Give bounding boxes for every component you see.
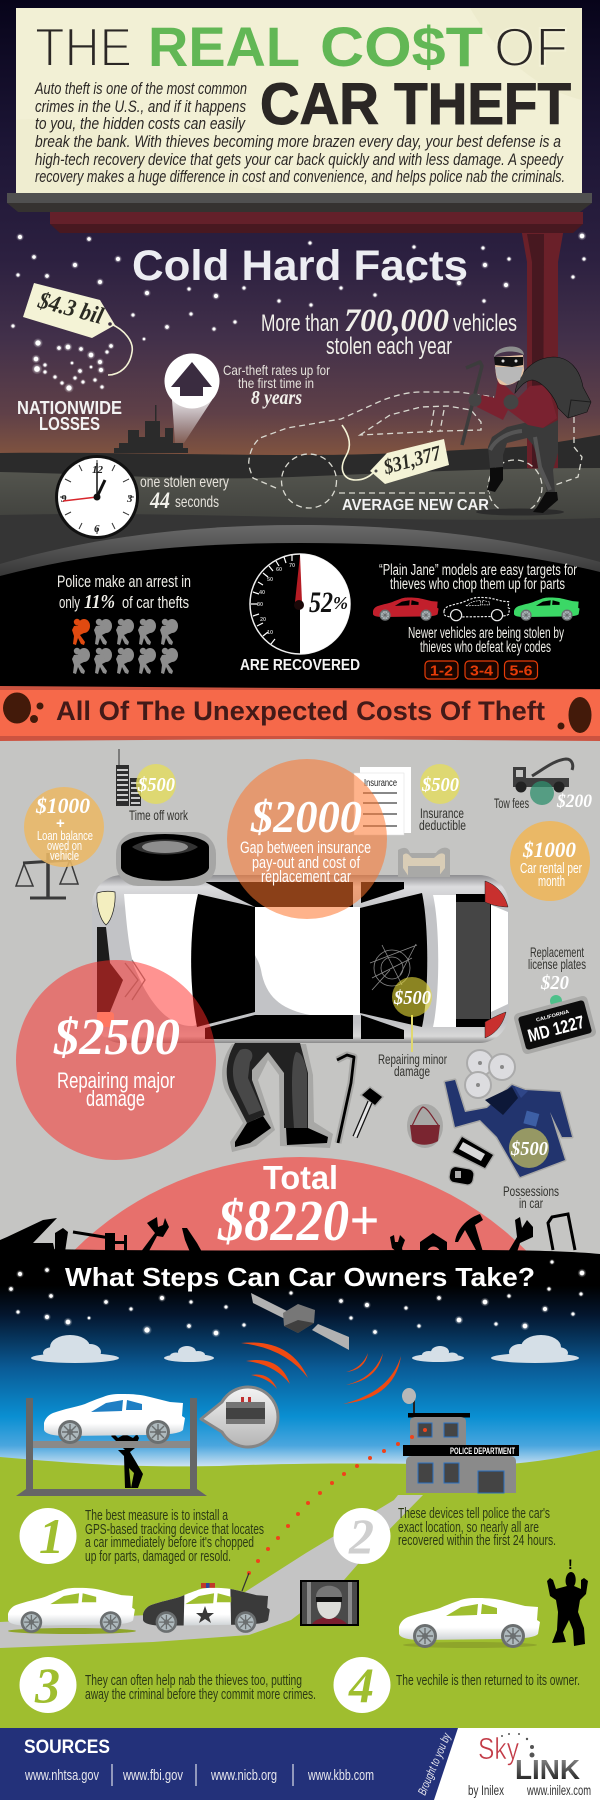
- gauge: 52% recovered: 10: [267, 630, 273, 636]
- icon: insurance document: [354, 767, 411, 835]
- stat: 700,000 vehicles: More than: [261, 310, 339, 337]
- step 1: [20, 1507, 264, 1565]
- icon: police car: [141, 1573, 274, 1633]
- cost: insurance deductible $500: Insurance: [420, 805, 464, 821]
- cost: gap $2000: Gap between insurance: [240, 838, 371, 857]
- icon: celebrating owner: [547, 1556, 588, 1646]
- stat: 700,000 vehicles: stolen each year: [326, 333, 452, 360]
- source links: www.nhtsa.gov: [24, 1767, 99, 1784]
- cost: minor damage $500: Repairing minor: [378, 1051, 447, 1067]
- title: CAR THEFT: [260, 72, 571, 137]
- stat: 700,000 vehicles: [261, 303, 517, 360]
- pillar supporting billboard: [521, 228, 564, 470]
- cost: gap $2000: [227, 759, 387, 919]
- icon: jacket: [445, 1080, 572, 1177]
- step 2: 2: [348, 1508, 374, 1564]
- title: OF: [494, 16, 568, 78]
- source links: www.kbb.com: [307, 1767, 374, 1784]
- step 3: 3: [34, 1657, 60, 1713]
- icons: three small cars: [373, 597, 580, 621]
- step 1: a car immediately before it's chopped: [85, 1534, 254, 1551]
- title: REAL: [148, 15, 300, 78]
- heading: sources: SOURCES: [24, 1737, 110, 1758]
- stat: rates up in 8 years: the first time in: [238, 375, 314, 391]
- cost: tow fees $200: [494, 781, 592, 812]
- price tag: nationwide losses: $4.3 bil: [35, 287, 106, 330]
- cost: time off work $500: Time off work: [129, 807, 189, 823]
- intro text block: [34, 79, 565, 186]
- icon: license plate: CALIFORNIA: [535, 1009, 570, 1024]
- title: [35, 15, 571, 137]
- stat: one stolen every 44 seconds: [140, 474, 229, 513]
- step 3: [20, 1657, 316, 1713]
- cost: gap $2000: $2000: [250, 791, 362, 842]
- gauge: 52% recovered: 60: [276, 567, 282, 573]
- panel: skylink logo: Brought to you by: [415, 1730, 454, 1797]
- icon: clock: 6: [94, 523, 100, 535]
- step 3: away the criminal before they commit more crimes.: [85, 1686, 316, 1703]
- icon: hammer: [355, 1088, 382, 1137]
- panel: skylink logo: Sky: [478, 1731, 519, 1766]
- clouds: [31, 1335, 579, 1363]
- banner: unexpected costs: [0, 686, 600, 741]
- cost: insurance deductible $500: deductible: [419, 817, 466, 833]
- icon: crowbar: [337, 1055, 354, 1143]
- gauge: 52% recovered: 50: [267, 577, 273, 583]
- stat: rates up in 8 years: [223, 362, 330, 409]
- label: average new car: AVERAGE NEW CAR: [342, 497, 489, 514]
- gauge: 52% recovered: %: [333, 593, 348, 613]
- illustration: thief legs: [222, 1043, 333, 1152]
- step 2: exact location, so nearly all are: [398, 1519, 539, 1536]
- intro text block: Auto theft is one of the most common: [34, 79, 247, 98]
- stars field: [10, 232, 587, 342]
- source links: [24, 1764, 374, 1786]
- icon: returned car: [399, 1598, 540, 1648]
- cost: car rental $1000: month: [538, 874, 565, 890]
- cost: time off work $500: [129, 764, 189, 823]
- stat: rates up in 8 years: Car-theft rates up for: [223, 362, 330, 378]
- icon: clock: 12: [92, 464, 104, 476]
- icons: compact discs: [465, 1050, 515, 1098]
- panel: skylink logo: LINK: [515, 1754, 580, 1785]
- icon: car seat: [398, 848, 450, 877]
- cost: car rental $1000: [510, 821, 590, 901]
- stat: one stolen every 44 seconds: one stolen every: [140, 474, 229, 491]
- cost: time off work $500: $500: [137, 774, 175, 796]
- step 4: 4: [348, 1657, 374, 1713]
- tracking signal dots: [247, 1428, 427, 1575]
- stat: 700,000 vehicles: vehicles: [453, 310, 517, 337]
- icon: white car: [44, 1394, 185, 1444]
- heading: cold hard facts: Cold Hard Facts: [132, 242, 468, 290]
- gauge: 52% recovered: 52: [309, 586, 333, 619]
- gauge: 52% recovered: 30: [257, 602, 263, 608]
- tools silhouettes: [0, 1214, 575, 1253]
- landscape hills: [0, 468, 600, 600]
- cost: license plates $20: [513, 944, 597, 1055]
- icon: clock: 9: [61, 493, 67, 505]
- cost: loan balance $1000: [24, 787, 104, 867]
- price tag: average new car: [342, 425, 449, 484]
- stat: one stolen every 44 seconds: seconds: [175, 494, 219, 511]
- green ground: [0, 1450, 600, 1730]
- intro text block: to you, the hidden costs can easily: [35, 114, 246, 133]
- billboard beam: [50, 212, 583, 233]
- icon: key fob: [449, 1166, 474, 1185]
- stars lower: [8, 1259, 586, 1338]
- cost: possessions $500: in car: [519, 1195, 543, 1211]
- icon: satellite: [251, 1293, 349, 1350]
- text: newer vehicles: [408, 625, 564, 656]
- label: nationwide losses: LOSSES: [39, 414, 100, 434]
- cost: possessions $500: [503, 1128, 559, 1211]
- gauge: 52% recovered: 20: [260, 617, 266, 623]
- price tag: average new car: $31,377: [380, 440, 445, 479]
- icon: cracked glass: [370, 944, 417, 990]
- cost: loan balance $1000: owed on: [47, 838, 82, 853]
- icon: signal arcs: [241, 1342, 401, 1404]
- cost: tow fees $200: $200: [556, 791, 592, 812]
- stat: rates up in 8 years: 8 years: [251, 387, 302, 409]
- night sky background: [0, 0, 600, 700]
- total dome: Total: [263, 1159, 338, 1196]
- label: are recovered: ARE RECOVERED: [240, 657, 360, 674]
- grey cost section background: [0, 738, 600, 1260]
- cost: gap $2000: replacement car: [261, 867, 351, 886]
- panel: sources footer: [0, 1728, 600, 1800]
- cost: loan balance $1000: Loan balance: [37, 828, 93, 843]
- illustration: top-view car: [92, 875, 509, 1043]
- badges: key codes: 3-4: [470, 664, 493, 680]
- badges: key codes: 1-2: [430, 664, 453, 680]
- cost: loan balance $1000: vehicle: [50, 848, 79, 863]
- icon: purse: [407, 1104, 443, 1148]
- cost: possessions $500: $500: [510, 1138, 548, 1160]
- cost: insurance deductible $500: [419, 764, 466, 833]
- text: plain jane: [379, 562, 577, 593]
- cost: major damage $2500: [16, 960, 216, 1160]
- icon: tire: [116, 832, 216, 886]
- icon: license plate: MD 1227: [525, 1012, 587, 1046]
- badges: key codes: 5-6: [510, 664, 532, 680]
- step 1: up for parts, damaged or resold.: [85, 1548, 231, 1565]
- cost: loan balance $1000: +: [56, 815, 65, 832]
- gauge: 52% recovered: [250, 554, 350, 654]
- cost: major damage $2500: Repairing major: [57, 1068, 175, 1093]
- billboard ledge: [7, 193, 592, 212]
- sky and stars backdrop: [0, 1248, 600, 1480]
- icon: clock: [55, 455, 139, 539]
- step 4: [334, 1657, 580, 1713]
- cost: minor damage $500: [378, 977, 447, 1079]
- icon: office building: [116, 749, 141, 806]
- icon: license plate: [513, 995, 597, 1055]
- icon: police department: POLICE DEPARTMENT: [450, 1446, 515, 1456]
- icon: jailed thief: [300, 1580, 359, 1626]
- cost: possessions $500: Possessions: [503, 1183, 559, 1199]
- price tag: nationwide losses: [23, 283, 132, 375]
- gauge: 52% recovered: 40: [259, 590, 265, 596]
- step 1: The best measure is to install a: [85, 1507, 228, 1524]
- icon: city skyline: [114, 405, 188, 453]
- dashed car outline: [249, 392, 582, 514]
- icon: insurance document: Insurance: [364, 778, 397, 789]
- cost: tow fees $200: Tow fees: [494, 795, 529, 811]
- source links: www.nicb.org: [210, 1767, 277, 1784]
- stat: police arrest 11%: only: [59, 593, 80, 612]
- step 2: [334, 1505, 556, 1564]
- icon: white car with shadow: [8, 1588, 136, 1634]
- badges: key codes: [425, 661, 538, 680]
- stat: police arrest 11%: [57, 572, 191, 613]
- step 3: They can often help nab the thieves too, putting: [85, 1672, 302, 1689]
- illustration: car lift: [16, 1394, 207, 1496]
- windshield arc: [0, 525, 600, 700]
- cost: gap $2000: pay-out and cost of: [252, 853, 360, 872]
- cost: license plates $20: $20: [540, 972, 569, 994]
- icon: police department: [402, 1388, 519, 1493]
- icon: up arrow pin: [164, 354, 220, 443]
- panel: title billboard: [16, 8, 582, 193]
- banner: unexpected costs: All Of The Unexpected Costs Of Theft: [56, 696, 545, 726]
- stat: police arrest 11%: Police make an arrest in: [57, 572, 191, 591]
- icon: tow truck: [513, 759, 573, 792]
- total dome: $8220+: [217, 1188, 379, 1253]
- step 1: GPS-based tracking device that locates: [85, 1521, 264, 1538]
- icon: scales: [16, 853, 78, 898]
- icon array: thieves: [72, 619, 178, 674]
- heading: what steps: What Steps Can Car Owners Take?: [65, 1262, 535, 1292]
- gauge: 52% recovered: 70: [289, 563, 295, 569]
- cost: insurance deductible $500: $500: [421, 774, 459, 796]
- label: nationwide losses: [17, 398, 122, 434]
- label: nationwide losses: NATIONWIDE: [17, 398, 122, 418]
- stat: 700,000 vehicles: 700,000: [344, 303, 449, 339]
- cost: minor damage $500: $500: [393, 987, 431, 1009]
- cost: loan balance $1000: $1000: [35, 793, 90, 818]
- icon: clock: 3: [126, 493, 133, 505]
- icon: celebrating owner: !: [568, 1556, 573, 1572]
- illustration: thief with sack: [462, 347, 591, 516]
- total dome: [0, 1157, 600, 1797]
- stat: one stolen every 44 seconds: 44: [149, 488, 170, 513]
- cost: major damage $2500: damage: [86, 1086, 145, 1111]
- panel: skylink logo: [415, 1728, 600, 1800]
- cost: major damage $2500: $2500: [53, 1009, 180, 1066]
- title: CO$T: [320, 15, 483, 78]
- title: THE: [35, 16, 132, 78]
- panel: skylink logo: by Inilex: [468, 1782, 504, 1798]
- icon: tablet phone: [453, 1137, 493, 1168]
- icon: road: [0, 1495, 423, 1648]
- stat: police arrest 11%: of car thefts: [122, 593, 189, 612]
- source links: www.fbi.gov: [122, 1767, 183, 1784]
- cost: minor damage $500: damage: [394, 1063, 430, 1079]
- landscape back hill: [0, 435, 600, 600]
- intro text block: crimes in the U.S., and if it happens: [35, 97, 246, 116]
- cost: car rental $1000: $1000: [522, 837, 576, 862]
- icon: mechanic silhouette: [111, 1434, 143, 1488]
- icon: stars forming dollar: [32, 338, 114, 393]
- stat: police arrest 11%: 11%: [84, 591, 115, 613]
- step 1: 1: [39, 1508, 64, 1564]
- icon: tracking device bubble: [201, 1387, 278, 1447]
